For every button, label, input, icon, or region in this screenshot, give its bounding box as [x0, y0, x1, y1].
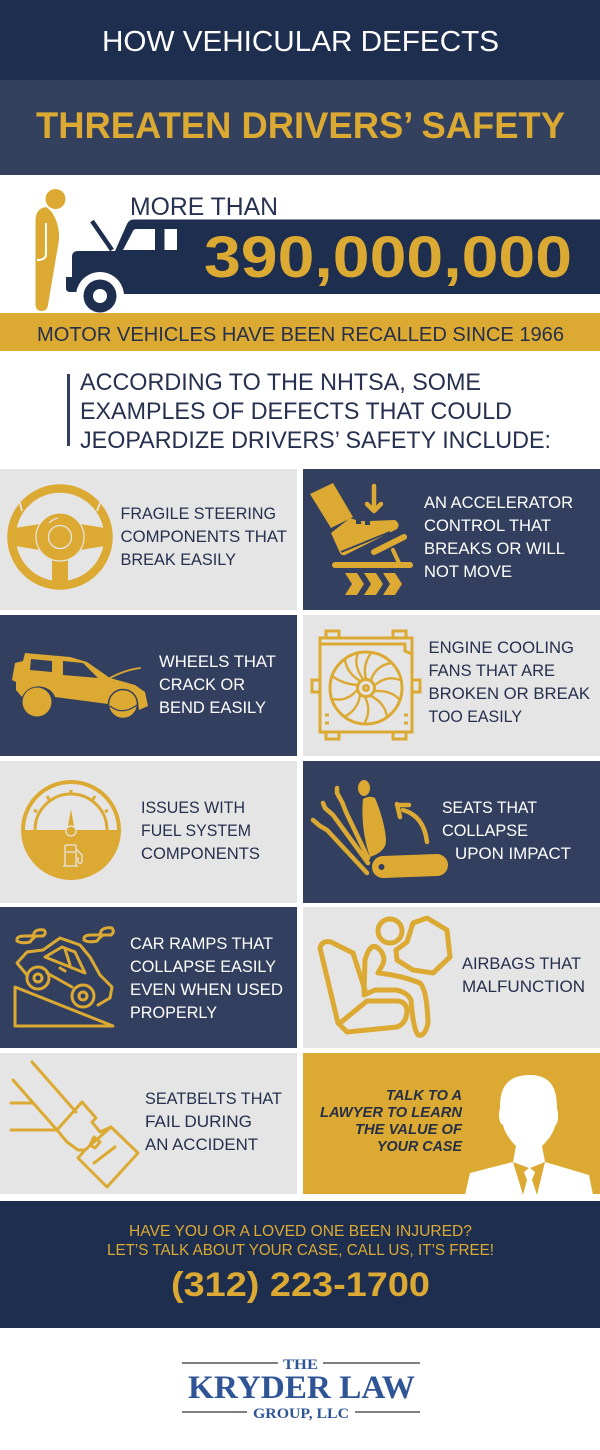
- panel: talk to a lawyer: TALK TO A: [386, 1088, 462, 1104]
- logo: THE: [283, 1357, 318, 1373]
- intro text block: [67, 369, 551, 454]
- icon: seatbelt buckle: [11, 1062, 138, 1187]
- panel: steering components: COMPONENTS THAT: [120, 527, 287, 546]
- intro text block: ACCORDING TO THE NHTSA, SOME: [80, 369, 481, 396]
- panel: seats: SEATS THAT: [442, 798, 537, 817]
- truck and statistic band: [66, 220, 600, 320]
- icon: airbag and seat: [320, 918, 450, 1035]
- panel: accelerator: BREAKS OR WILL: [424, 539, 565, 558]
- icon: foot on pedal: [310, 483, 410, 595]
- logo: GROUP, LLC: [253, 1406, 349, 1422]
- panel: talk to a lawyer: [303, 1053, 600, 1195]
- panel: accelerator: NOT MOVE: [424, 562, 512, 581]
- panel: seats: [303, 761, 600, 903]
- panel: cooling fans: BROKEN OR BREAK: [428, 684, 591, 703]
- intro text block: JEOPARDIZE DRIVERS’ SAFETY INCLUDE:: [80, 427, 551, 454]
- icon: fuel gauge: [21, 782, 121, 880]
- icon: person looking at car: [36, 189, 66, 311]
- panel: car ramps: CAR RAMPS THAT: [130, 934, 273, 953]
- panel: cooling fans: [303, 615, 600, 756]
- icon: car with broken wheel: [12, 653, 148, 718]
- panel: car ramps: COLLAPSE EASILY: [130, 957, 276, 976]
- icon: lawyer silhouette: [465, 1075, 593, 1195]
- icon: car on ramp: [15, 928, 113, 1026]
- panel: wheels: BEND EASILY: [159, 698, 266, 717]
- panel: fuel system: FUEL SYSTEM: [141, 821, 251, 840]
- panel: cooling fans: ENGINE COOLING: [428, 638, 574, 657]
- panel: car ramps: [0, 907, 297, 1048]
- panel: seatbelts: FAIL DURING: [145, 1112, 252, 1131]
- panel: talk to a lawyer: LAWYER TO LEARN: [320, 1105, 463, 1121]
- panel: steering components: [0, 469, 297, 610]
- panel: seatbelts: SEATBELTS THAT: [145, 1089, 282, 1108]
- panel: airbags: AIRBAGS THAT: [462, 954, 581, 973]
- recalled band: MOTOR VEHICLES HAVE BEEN RECALLED SINCE 1966: [37, 324, 564, 346]
- panel: wheels: CRACK OR: [159, 675, 245, 694]
- panel: wheels: WHEELS THAT: [159, 652, 276, 671]
- intro text block: EXAMPLES OF DEFECTS THAT COULD: [80, 398, 512, 425]
- panel: cooling fans: FANS THAT ARE: [428, 661, 555, 680]
- panel: accelerator: CONTROL THAT: [424, 516, 551, 535]
- panel: cooling fans: TOO EASILY: [428, 707, 522, 726]
- panel: fuel system: ISSUES WITH: [141, 798, 245, 817]
- panel: car ramps: PROPERLY: [130, 1003, 217, 1022]
- panel: seatbelts: [0, 1053, 297, 1194]
- panel: wheels: [0, 615, 297, 756]
- footer call to action: LET’S TALK ABOUT YOUR CASE, CALL US, IT’S FREE!: [107, 1242, 494, 1259]
- panel: seatbelts: AN ACCIDENT: [145, 1135, 258, 1154]
- statistic: 390,000,000: [204, 225, 572, 290]
- logo: [182, 1357, 420, 1422]
- panel: airbags: MALFUNCTION: [462, 977, 585, 996]
- footer call to action: HAVE YOU OR A LOVED ONE BEEN INJURED?: [129, 1223, 472, 1240]
- title line 1: HOW VEHICULAR DEFECTS: [102, 26, 499, 58]
- logo: KRYDER LAW: [188, 1370, 415, 1406]
- recalled band: [0, 313, 600, 351]
- panel: car ramps: EVEN WHEN USED: [130, 980, 283, 999]
- panel: accelerator: [303, 469, 600, 610]
- icon: steering wheel: [12, 488, 108, 586]
- panel: airbags: [303, 907, 600, 1048]
- phone number: (312) 223-1700: [171, 1266, 430, 1304]
- icon: collapsing seat: [313, 780, 437, 873]
- panel: talk to a lawyer: YOUR CASE: [377, 1139, 463, 1155]
- panel: steering components: FRAGILE STEERING: [120, 504, 276, 523]
- title line 2: THREATEN DRIVERS’ SAFETY: [36, 105, 565, 146]
- panel: accelerator: AN ACCELERATOR: [424, 493, 573, 512]
- panel: talk to a lawyer: THE VALUE OF: [355, 1122, 463, 1138]
- more than label: MORE THAN: [130, 193, 278, 221]
- panel: steering components: BREAK EASILY: [120, 550, 236, 569]
- panel: seats: UPON IMPACT: [455, 844, 571, 863]
- panel: seats: COLLAPSE: [442, 821, 528, 840]
- panel: fuel system: COMPONENTS: [141, 844, 260, 863]
- footer call to action: [0, 1201, 600, 1328]
- icon: radiator fan: [312, 631, 420, 739]
- panel: fuel system: [0, 761, 297, 903]
- header panel: [0, 0, 600, 175]
